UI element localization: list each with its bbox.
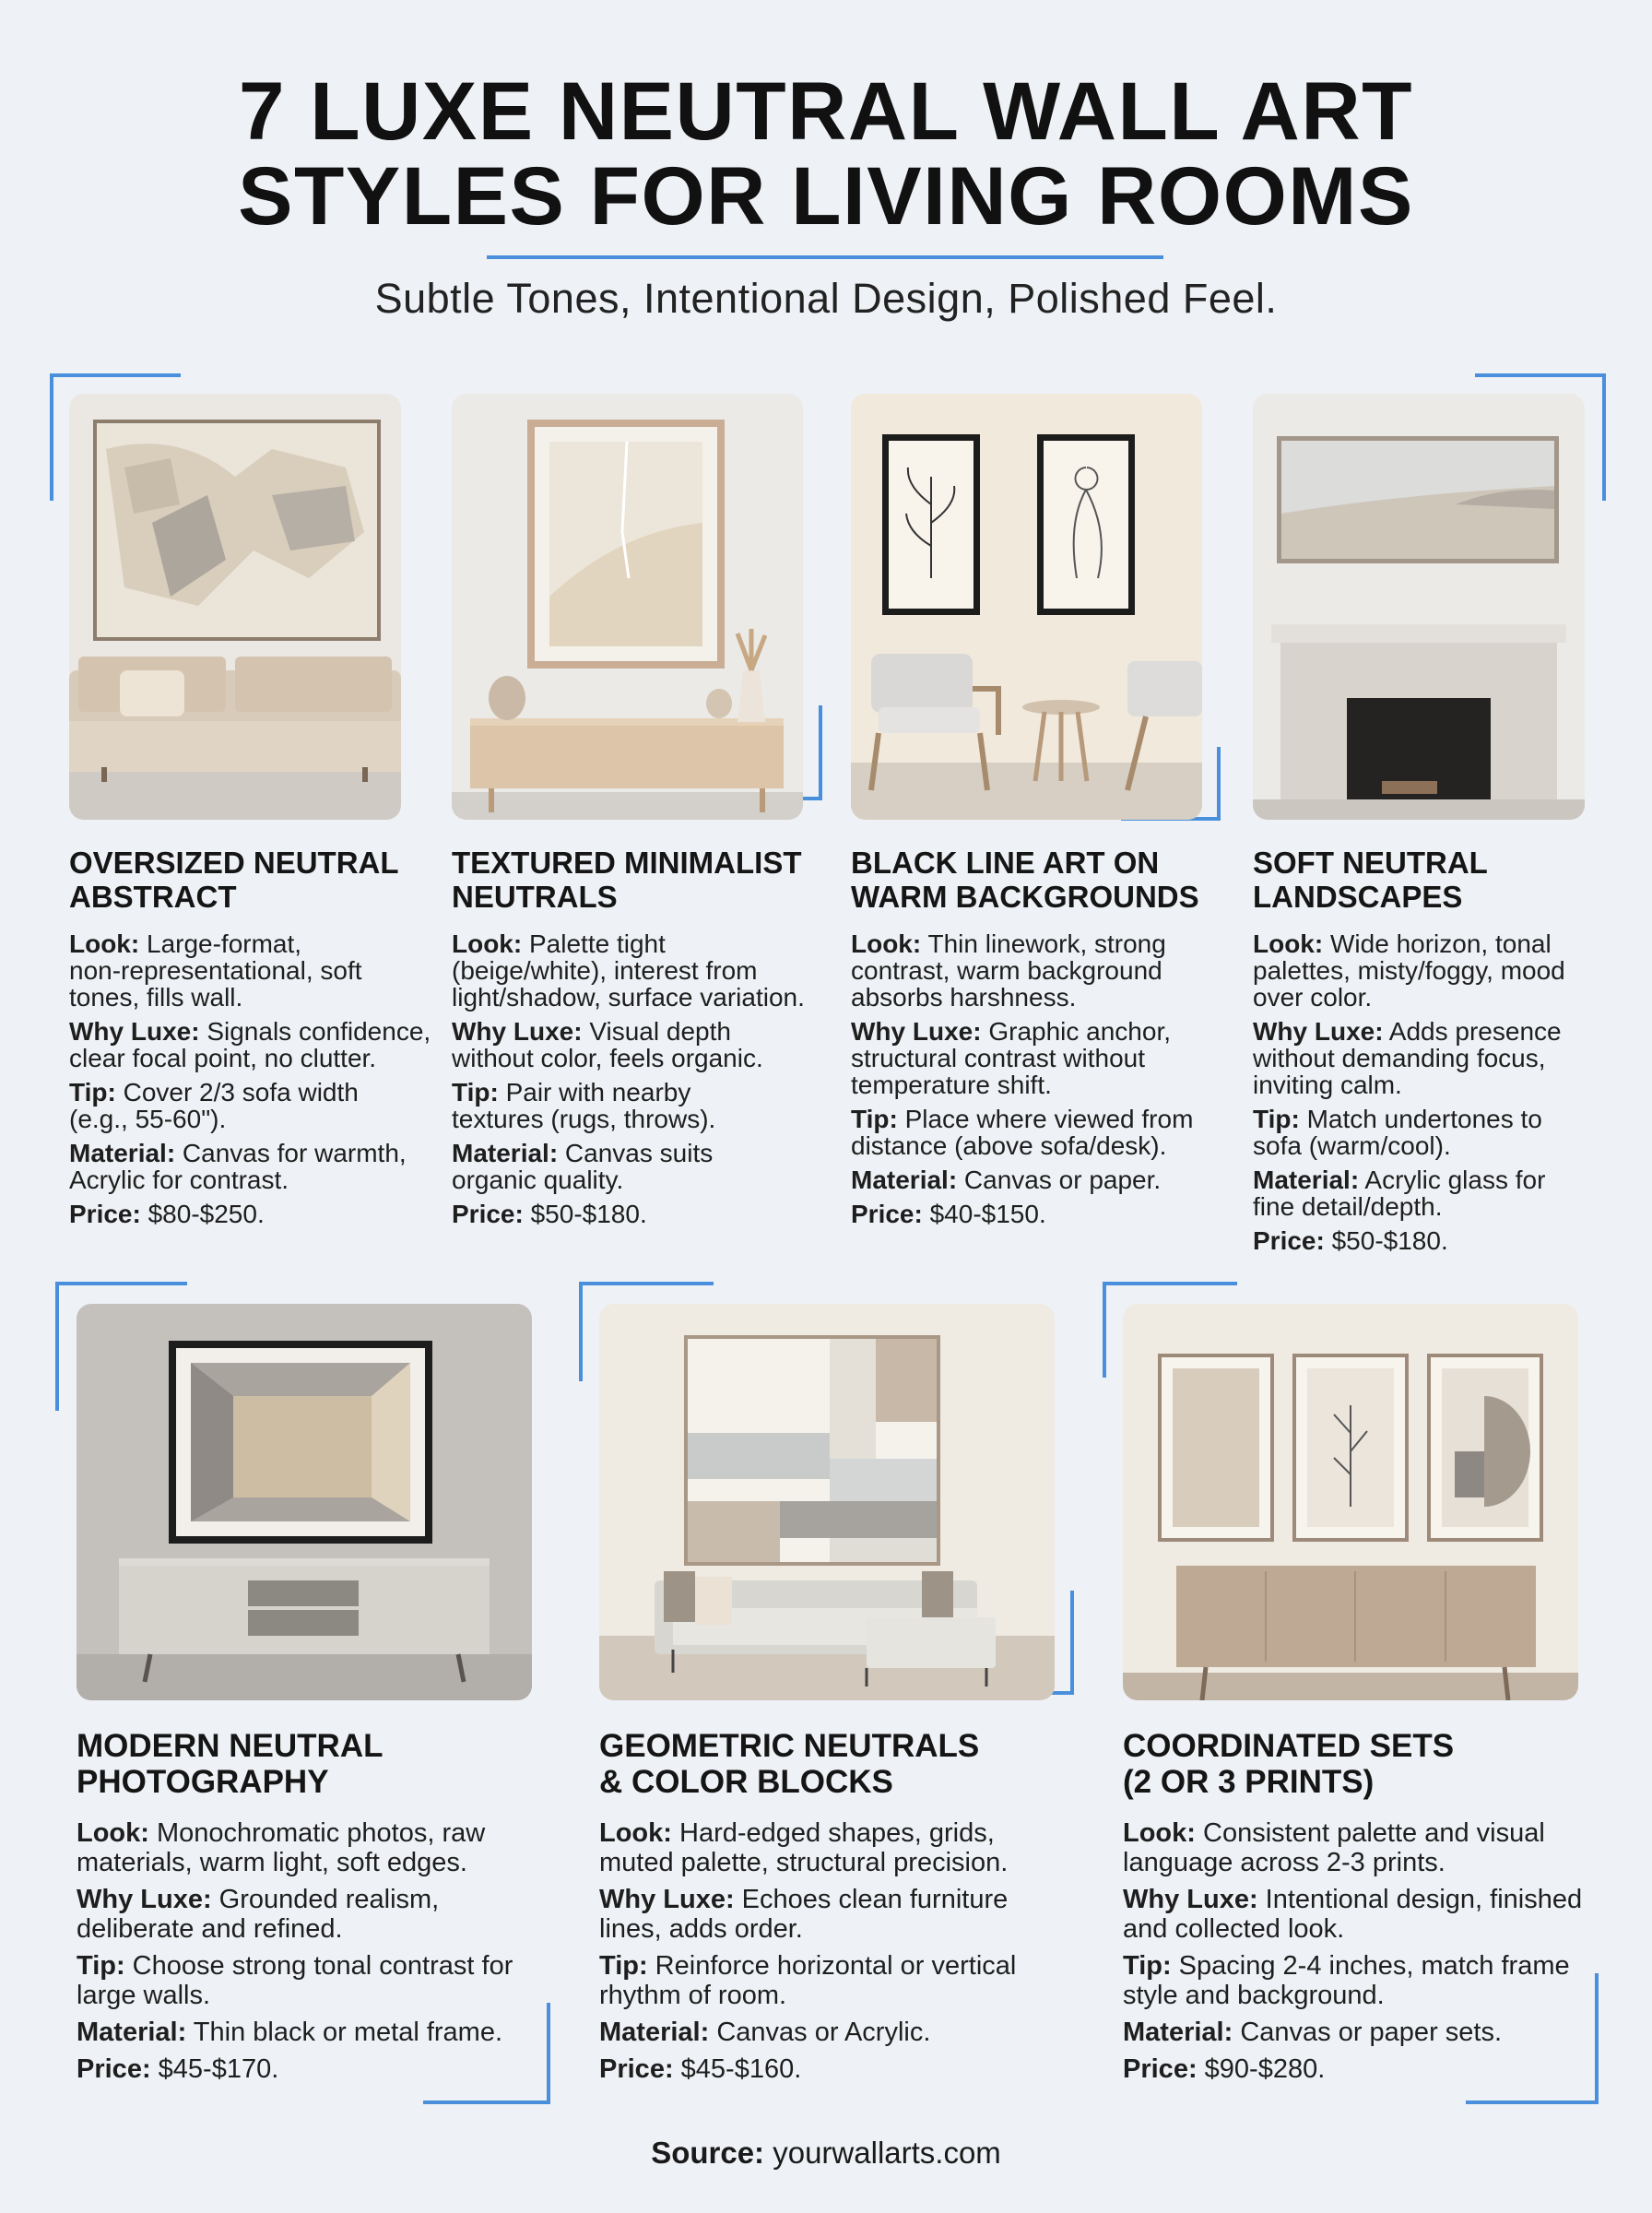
body text: Price: $45-$170.: [77, 2054, 278, 2084]
body text: Price: $90-$280.: [1123, 2054, 1325, 2084]
heading: (2 OR 3 PRINTS): [1123, 1764, 1374, 1800]
heading: LANDSCAPES: [1253, 880, 1462, 914]
illustration: abstract over sofa: [69, 394, 401, 820]
body text: organic quality.: [452, 1166, 623, 1194]
body text: Look: Thin linework, strong: [851, 929, 1166, 958]
body text: Look: Wide horizon, tonal: [1253, 929, 1552, 958]
body text: Why Luxe: Grounded realism,: [77, 1885, 439, 1914]
body text: Why Luxe: Graphic anchor,: [851, 1017, 1171, 1046]
body text: inviting calm.: [1253, 1071, 1402, 1099]
heading: ABSTRACT: [69, 880, 236, 914]
body text: Look: Palette tight: [452, 929, 666, 958]
body text: Why Luxe: Adds presence: [1253, 1017, 1562, 1046]
body text: Material: Thin black or metal frame.: [77, 2018, 502, 2047]
body text: absorbs harshness.: [851, 983, 1076, 1012]
heading: SOFT NEUTRAL: [1253, 846, 1488, 880]
body text: materials, warm light, soft edges.: [77, 1848, 467, 1877]
body text: without demanding focus,: [1253, 1044, 1546, 1072]
body text: contrast, warm background: [851, 956, 1162, 985]
body text: Tip: Spacing 2-4 inches, match frame: [1123, 1951, 1570, 1981]
body text: Look: Consistent palette and visual: [1123, 1818, 1545, 1848]
heading: MODERN NEUTRAL: [77, 1728, 383, 1764]
body text: Material: Acrylic glass for: [1253, 1166, 1545, 1194]
body text: without color, feels organic.: [452, 1044, 763, 1072]
body text: Why Luxe: Echoes clean furniture: [599, 1885, 1008, 1914]
body text: Material: Canvas or paper.: [851, 1166, 1161, 1194]
body text: Material: Canvas for warmth,: [69, 1139, 407, 1167]
title: STYLES FOR LIVING ROOMS: [238, 149, 1414, 242]
panel: geometric neutrals: [599, 1304, 1055, 2084]
body text: [599, 1818, 1016, 2084]
body text: Tip: Place where viewed from: [851, 1105, 1193, 1133]
body text: deliberate and refined.: [77, 1914, 343, 1944]
body text: Tip: Pair with nearby: [452, 1078, 690, 1106]
heading: [599, 1728, 979, 1800]
body text: [1123, 1818, 1582, 2084]
panel: oversized neutral abstract: [69, 394, 431, 1228]
body text: lines, adds order.: [599, 1914, 803, 1944]
body text: [452, 929, 805, 1228]
body text: textures (rugs, throws).: [452, 1105, 715, 1133]
body text: tones, fills wall.: [69, 983, 242, 1012]
panel: coordinated sets: [1123, 1304, 1582, 2084]
body text: language across 2-3 prints.: [1123, 1848, 1446, 1877]
title: 7 LUXE NEUTRAL WALL ART: [239, 65, 1413, 157]
body text: distance (above sofa/desk).: [851, 1131, 1166, 1160]
body text: Price: $45-$160.: [599, 2054, 801, 2084]
heading: COORDINATED SETS: [1123, 1728, 1454, 1764]
heading: NEUTRALS: [452, 880, 618, 914]
heading: TEXTURED MINIMALIST: [452, 846, 801, 880]
body text: Tip: Choose strong tonal contrast for: [77, 1951, 513, 1981]
body text: sofa (warm/cool).: [1253, 1131, 1451, 1160]
body text: (e.g., 55-60").: [69, 1105, 226, 1133]
title underline: [487, 255, 1163, 259]
body text: Acrylic for contrast.: [69, 1166, 289, 1194]
body text: light/shadow, surface variation.: [452, 983, 805, 1012]
body text: [69, 929, 431, 1228]
heading: [1123, 1728, 1454, 1800]
body text: non-representational, soft: [69, 956, 362, 985]
body text: Why Luxe: Intentional design, finished: [1123, 1885, 1582, 1914]
heading: [77, 1728, 383, 1800]
body text: over color.: [1253, 983, 1372, 1012]
illustration: textured art over console: [452, 394, 803, 820]
heading: GEOMETRIC NEUTRALS: [599, 1728, 979, 1764]
panel: soft neutral landscapes: [1253, 394, 1585, 1255]
body text: Material: Canvas suits: [452, 1139, 713, 1167]
body text: structural contrast without: [851, 1044, 1145, 1072]
illustration: three prints over sideboard: [1123, 1304, 1578, 1700]
body text: rhythm of room.: [599, 1981, 786, 2010]
illustration: line art frames with chairs: [851, 394, 1202, 820]
body text: muted palette, structural precision.: [599, 1848, 1008, 1877]
body text: and collected look.: [1123, 1914, 1344, 1944]
body text: [851, 929, 1193, 1228]
heading: OVERSIZED NEUTRAL: [69, 846, 399, 880]
subtitle: Subtle Tones, Intentional Design, Polished Feel.: [375, 275, 1277, 322]
body text: clear focal point, no clutter.: [69, 1044, 376, 1072]
body text: temperature shift.: [851, 1071, 1052, 1099]
body text: (beige/white), interest from: [452, 956, 757, 985]
heading: [452, 846, 802, 914]
body text: Look: Hard-edged shapes, grids,: [599, 1818, 995, 1848]
body text: Why Luxe: Signals confidence,: [69, 1017, 431, 1046]
body text: large walls.: [77, 1981, 210, 2010]
panel: textured minimalist neutrals: [452, 394, 805, 1228]
body text: [1253, 929, 1565, 1255]
title: [238, 65, 1414, 242]
heading: & COLOR BLOCKS: [599, 1764, 893, 1800]
body text: style and background.: [1123, 1981, 1385, 2010]
body text: palettes, misty/foggy, mood: [1253, 956, 1565, 985]
heading: BLACK LINE ART ON: [851, 846, 1159, 880]
body text: Material: Canvas or Acrylic.: [599, 2018, 930, 2047]
body text: Tip: Match undertones to: [1253, 1105, 1542, 1133]
body text: Price: $80-$250.: [69, 1200, 265, 1228]
panel: modern neutral photography: [77, 1304, 532, 2084]
body text: Price: $40-$150.: [851, 1200, 1046, 1228]
heading: [1253, 846, 1488, 914]
body text: Look: Large-format,: [69, 929, 301, 958]
illustration: color block art over sectional: [599, 1304, 1055, 1700]
heading: PHOTOGRAPHY: [77, 1764, 329, 1800]
panel: black line art: [851, 394, 1202, 1228]
body text: Tip: Cover 2/3 sofa width: [69, 1078, 359, 1106]
body text: Look: Monochromatic photos, raw: [77, 1818, 485, 1848]
illustration: landscape over fireplace: [1253, 394, 1585, 820]
body text: Material: Canvas or paper sets.: [1123, 2018, 1502, 2047]
source: Source: yourwallarts.com: [651, 2136, 1001, 2170]
body text: fine detail/depth.: [1253, 1192, 1442, 1221]
body text: Price: $50-$180.: [1253, 1226, 1448, 1255]
body text: Price: $50-$180.: [452, 1200, 647, 1228]
heading: [851, 846, 1199, 914]
body text: Tip: Reinforce horizontal or vertical: [599, 1951, 1016, 1981]
heading: WARM BACKGROUNDS: [851, 880, 1199, 914]
heading: [69, 846, 399, 914]
illustration: photo over media console: [77, 1304, 532, 1700]
body text: Why Luxe: Visual depth: [452, 1017, 731, 1046]
body text: [77, 1818, 513, 2084]
